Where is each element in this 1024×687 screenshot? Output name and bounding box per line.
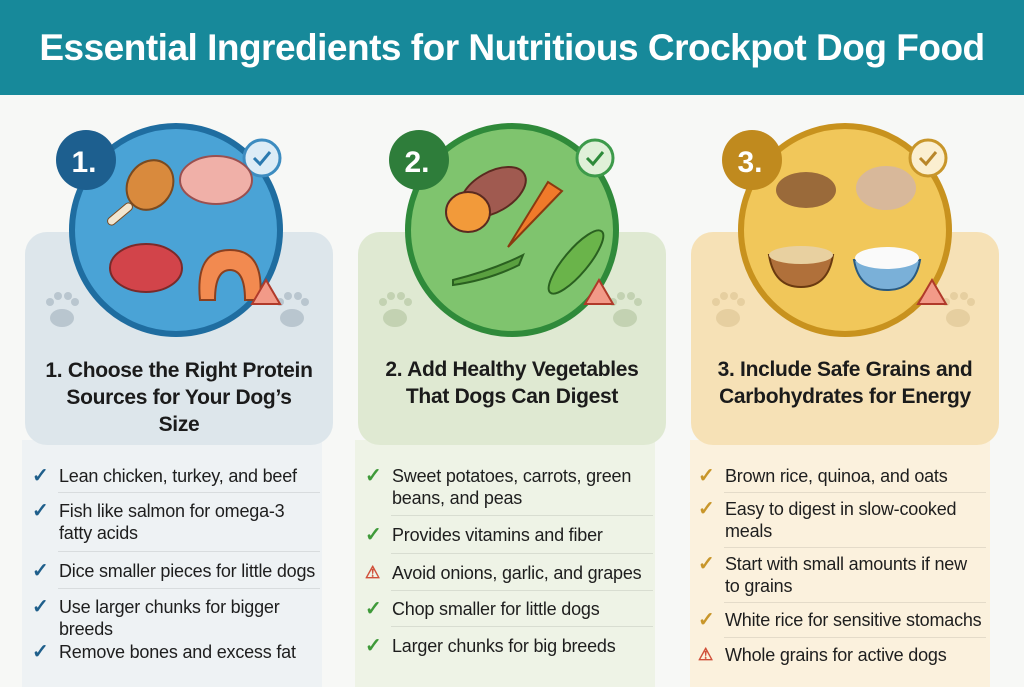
panel: protein: Use larger chunks for bigger <box>59 597 280 617</box>
panel: protein: fatty acids <box>59 523 138 543</box>
panel: protein: Fish like salmon for omega-3 <box>59 501 284 521</box>
panel: grains: Whole grains for active dogs <box>725 645 947 665</box>
checklist <box>698 465 986 665</box>
title box <box>691 232 999 445</box>
heading: Sources for Your Dog’s <box>66 386 292 409</box>
panel: grains: ✓ <box>698 609 715 631</box>
panel: protein: ✓ <box>32 641 49 663</box>
list background <box>22 440 322 687</box>
list background <box>355 440 655 687</box>
icon: vegetable circle <box>379 123 642 337</box>
checklist <box>32 465 320 663</box>
panel: protein <box>22 123 333 687</box>
panel: grains: ✓ <box>698 465 715 487</box>
panel: vegetables: ✓ <box>365 465 382 487</box>
panel: grains: ✓ <box>698 553 715 575</box>
panel: grains: Start with small amounts if new <box>725 554 967 574</box>
panel: vegetables: ✓ <box>365 635 382 657</box>
panel: vegetables: Sweet potatoes, carrots, green <box>392 466 631 486</box>
icon: vegetable circle: 2. <box>404 146 430 179</box>
panel: vegetables: Provides vitamins and fiber <box>392 525 603 545</box>
panel: grains: to grains <box>725 576 792 596</box>
panel: grains: Brown rice, quinoa, and oats <box>725 466 948 486</box>
heading: Size <box>159 413 199 436</box>
panel: protein: ✓ <box>32 596 49 618</box>
panel: grains: ⚠ <box>698 645 713 664</box>
panel: protein: ✓ <box>32 465 49 487</box>
checklist <box>365 465 653 657</box>
panel: vegetables: ✓ <box>365 524 382 546</box>
list background <box>690 440 990 687</box>
panel: vegetables: ✓ <box>365 598 382 620</box>
title box <box>358 232 666 445</box>
heading <box>45 359 313 436</box>
panel: protein: ✓ <box>32 500 49 522</box>
panel: grains: White rice for sensitive stomachs <box>725 610 981 630</box>
panel: vegetables: Avoid onions, garlic, and grapes <box>392 563 641 583</box>
panel: protein: Remove bones and excess fat <box>59 642 296 662</box>
title box <box>25 232 333 445</box>
heading: Carbohydrates for Energy <box>719 385 971 408</box>
heading: 1. Choose the Right Protein <box>45 359 313 382</box>
heading: 2. Add Healthy Vegetables <box>385 358 639 381</box>
panel: grains <box>690 123 999 687</box>
panel: vegetables: beans, and peas <box>392 488 522 508</box>
panel: vegetables <box>355 123 666 687</box>
heading <box>385 358 639 408</box>
icon: grains circle <box>712 123 975 337</box>
panel: grains: Easy to digest in slow-cooked <box>725 499 956 519</box>
panel: protein: breeds <box>59 619 113 639</box>
panel: vegetables: ⚠ <box>365 563 380 582</box>
title <box>0 0 1024 95</box>
panel: protein: Dice smaller pieces for little dogs <box>59 561 315 581</box>
heading: 3. Include Safe Grains and <box>718 358 972 381</box>
icon: protein circle: 1. <box>71 146 97 179</box>
icon: grains circle: 3. <box>737 146 763 179</box>
title: Essential Ingredients for Nutritious Crockpot Dog Food <box>39 27 985 68</box>
panel: vegetables: Larger chunks for big breeds <box>392 636 616 656</box>
panel: protein: Lean chicken, turkey, and beef <box>59 466 297 486</box>
panel: grains: meals <box>725 521 772 541</box>
panel: vegetables: Chop smaller for little dogs <box>392 599 600 619</box>
panel: grains: ✓ <box>698 498 715 520</box>
icon: protein circle <box>46 123 309 337</box>
heading <box>718 358 972 408</box>
panel: protein: ✓ <box>32 560 49 582</box>
heading: That Dogs Can Digest <box>406 385 618 408</box>
